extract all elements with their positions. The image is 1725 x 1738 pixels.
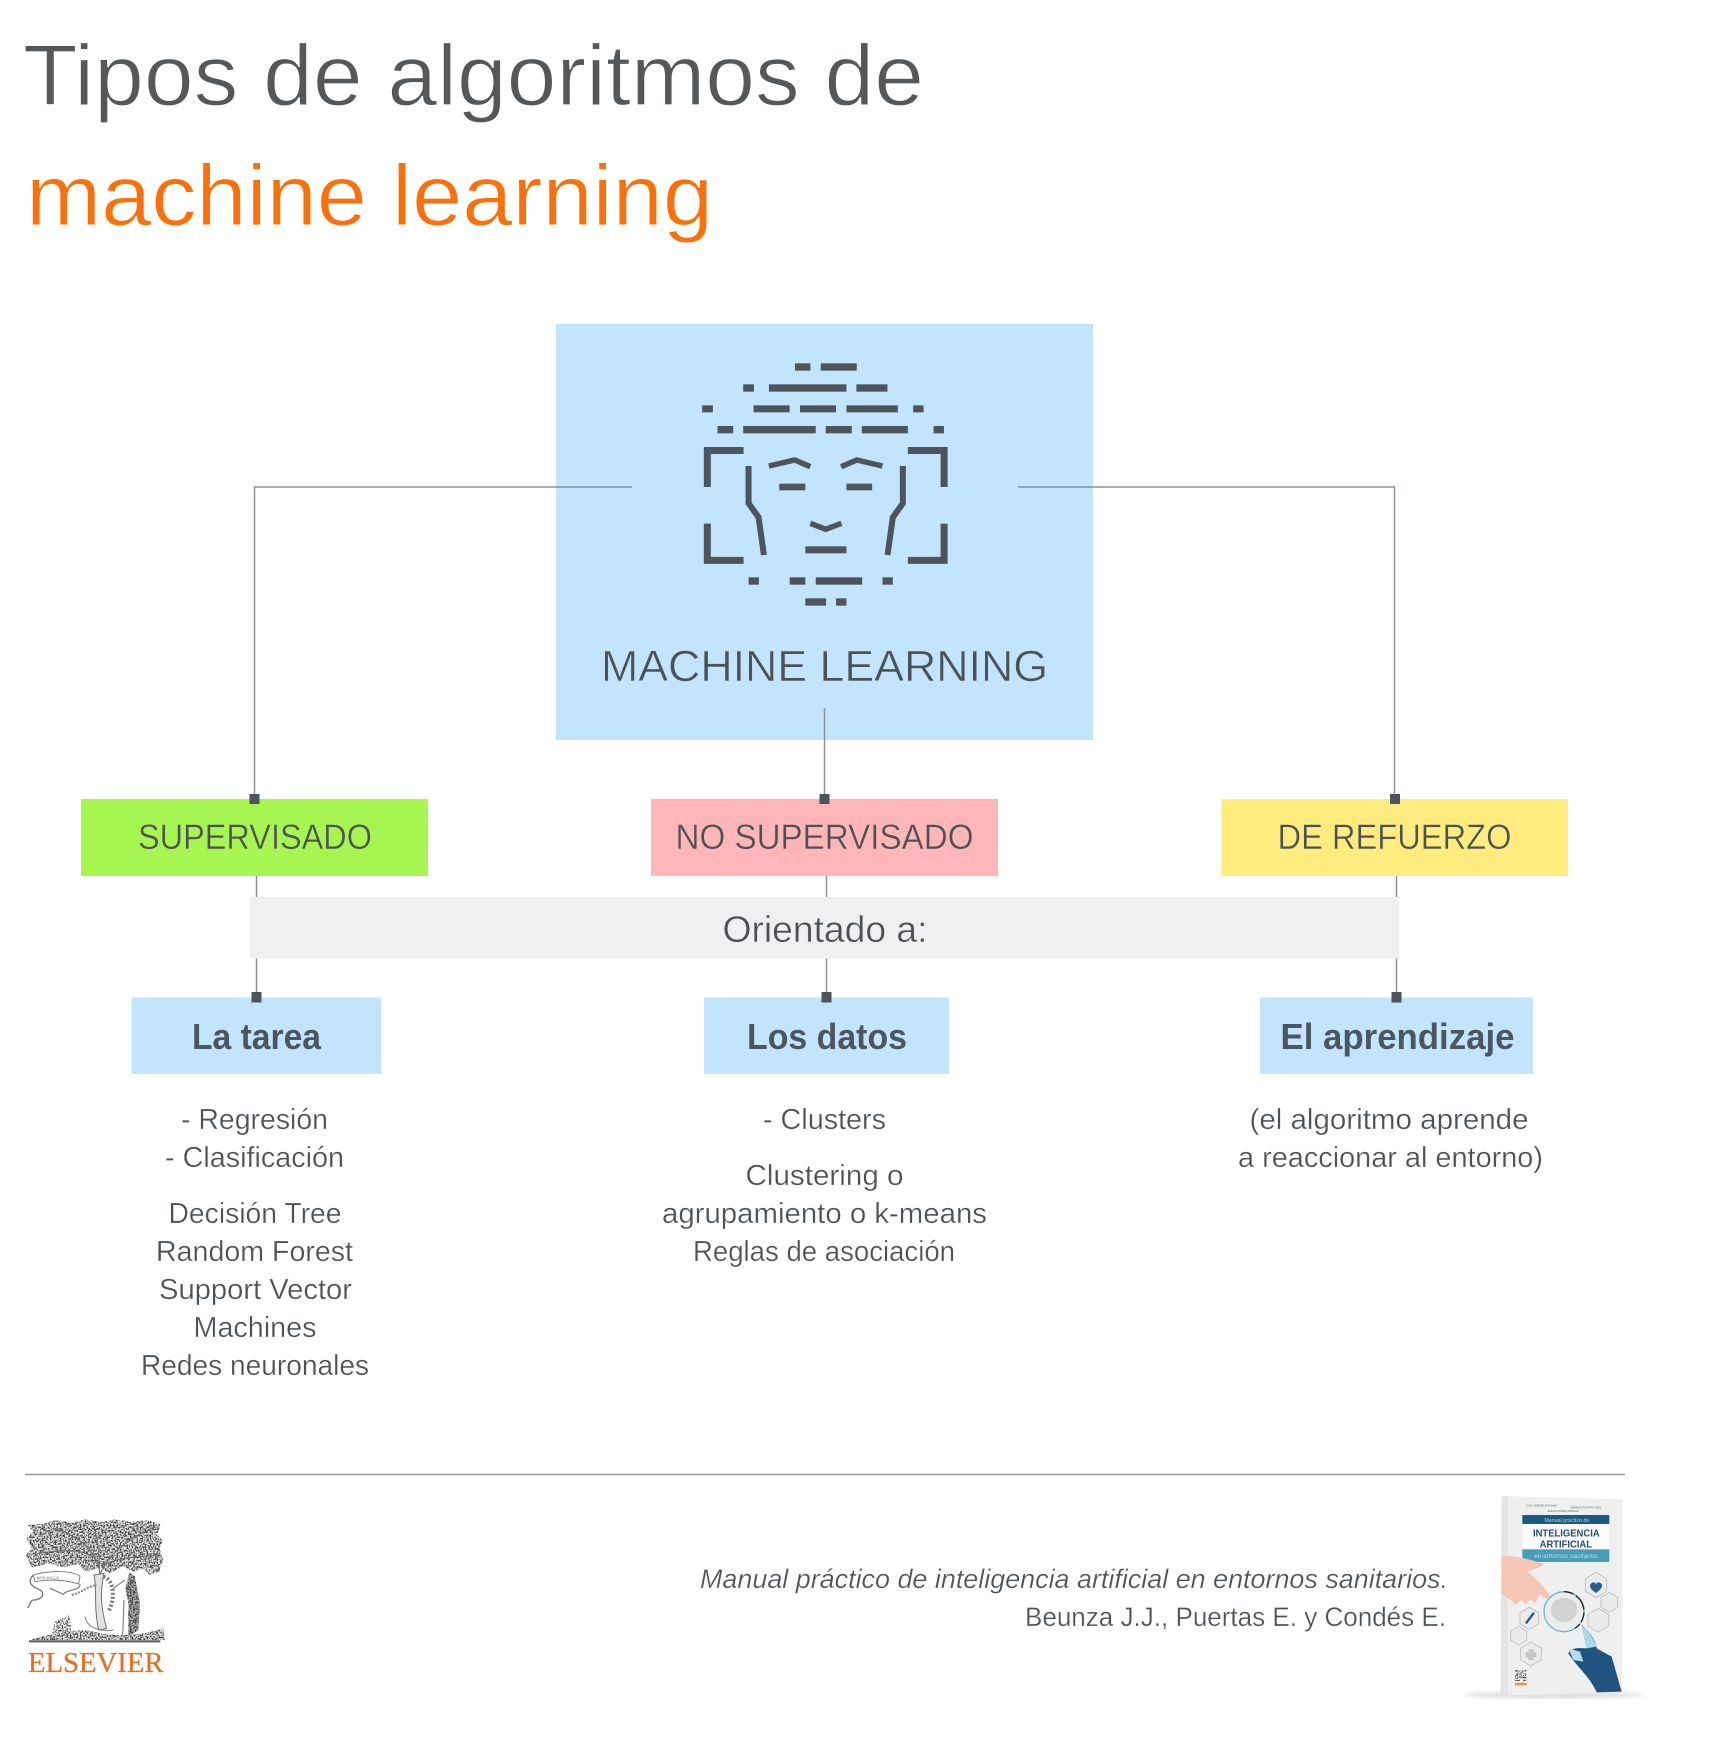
icon: elsevier tree: NON SOLUS xyxy=(37,1575,59,1580)
panel: la tarea xyxy=(132,998,382,1074)
text block: los datos: - Clusters xyxy=(763,1104,886,1136)
icon: elsevier tree xyxy=(26,1519,165,1642)
panel: supervisado xyxy=(81,799,428,876)
panel: los datos: Los datos xyxy=(747,1016,907,1057)
book cover: Manual práctico de xyxy=(1544,1518,1589,1524)
book cover: JUAN JOSÉ BEUNZA NUIN xyxy=(1526,1504,1557,1507)
text block: la tarea: Machines xyxy=(194,1312,316,1344)
book cover: en entornos sanitarios xyxy=(1534,1554,1598,1560)
citation text xyxy=(700,1564,1448,1632)
connector: machine learning to supervisado xyxy=(254,487,632,796)
connector: machine learning to de refuerzo xyxy=(1018,487,1394,796)
connector nodes: top row xyxy=(250,794,1400,804)
panel: de refuerzo: DE REFUERZO xyxy=(1278,818,1512,857)
text block: la tarea: Redes neuronales xyxy=(141,1350,369,1382)
panel: la tarea: La tarea xyxy=(192,1016,322,1057)
panel: de refuerzo xyxy=(1222,799,1568,876)
panel label: MACHINE LEARNING xyxy=(601,642,1048,691)
text block: los datos: agrupamiento o k-means xyxy=(662,1198,987,1230)
connector: machine learning to no supervisado xyxy=(824,708,826,796)
panel: el aprendizaje: El aprendizaje xyxy=(1280,1016,1514,1057)
book cover: ARTIFICIAL xyxy=(1540,1539,1592,1550)
panel: no supervisado: NO SUPERVISADO xyxy=(676,818,974,857)
book cover: ENRIQUE PUERTAS SANZ xyxy=(1571,1507,1602,1510)
panel: los datos xyxy=(704,998,949,1074)
text block: el aprendizaje xyxy=(1238,1104,1543,1174)
text block: la tarea: Random Forest xyxy=(156,1236,353,1268)
text block: la tarea: - Clasificación xyxy=(165,1142,344,1174)
text block: la tarea xyxy=(141,1104,369,1382)
text block: la tarea: Decisión Tree xyxy=(168,1198,342,1230)
book cover: INTELIGENCIA xyxy=(1533,1528,1600,1539)
book cover: EMILIA CONDÉS MORENO xyxy=(1548,1510,1579,1513)
text block: los datos: Clustering o xyxy=(746,1160,904,1192)
panel: orientado a: Orientado a: xyxy=(722,909,928,950)
text block: los datos: Reglas de asociación xyxy=(693,1236,955,1268)
book cover xyxy=(1463,1496,1643,1698)
title line 2: machine learning xyxy=(26,148,713,244)
text block: la tarea: - Regresión xyxy=(181,1104,328,1136)
icon: face xyxy=(702,363,944,606)
citation text: Manual práctico de inteligencia artificial en entornos sanitarios. xyxy=(700,1564,1448,1594)
panel: no supervisado xyxy=(651,799,998,876)
text block: la tarea: Support Vector xyxy=(159,1274,352,1306)
title xyxy=(23,28,924,244)
panel: orientado a xyxy=(250,897,1400,958)
panel: supervisado: SUPERVISADO xyxy=(138,818,372,857)
citation text: Beunza J.J., Puertas E. y Condés E. xyxy=(1025,1602,1446,1632)
text block: el aprendizaje: a reaccionar al entorno) xyxy=(1238,1142,1543,1174)
logo: elsevier xyxy=(26,1519,165,1679)
panel: el aprendizaje xyxy=(1260,998,1533,1074)
text block: los datos xyxy=(662,1104,987,1268)
connector nodes: lower row xyxy=(252,992,1402,1002)
panel: machine learning xyxy=(556,324,1093,740)
connectors: categories to orientation xyxy=(256,876,1396,993)
logo wordmark: ELSEVIER xyxy=(28,1647,164,1679)
title line 1: Tipos de algoritmos de xyxy=(23,28,924,124)
text block: el aprendizaje: (el algoritmo aprende xyxy=(1250,1104,1528,1136)
